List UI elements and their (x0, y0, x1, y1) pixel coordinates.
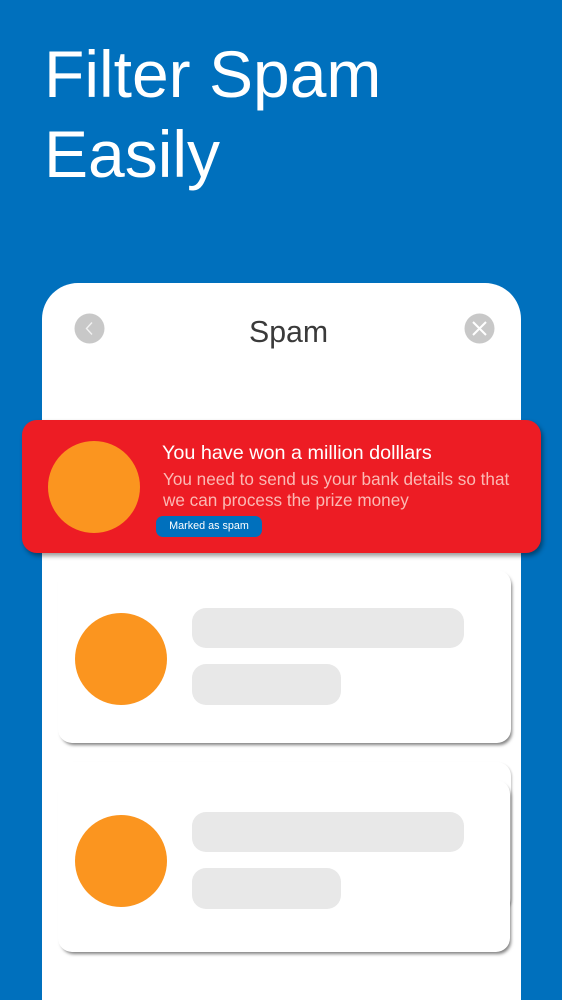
back button icon (74, 314, 104, 344)
back card edge (58, 762, 511, 912)
title (44, 37, 381, 191)
message card 1 (58, 570, 511, 743)
placeholder line short (192, 664, 341, 705)
placeholder line short (192, 868, 341, 909)
placeholder line (192, 608, 464, 648)
message card 2 (58, 780, 510, 952)
avatar (48, 441, 140, 533)
marked as spam badge: Marked as spam (169, 520, 249, 532)
avatar (75, 815, 167, 907)
panel: spam screen (42, 283, 521, 1000)
message body (163, 469, 510, 510)
title: Easily (44, 117, 220, 191)
message title: You have won a million dolllars (162, 442, 432, 464)
title: Filter Spam (44, 37, 381, 111)
screen heading: Spam (249, 316, 328, 349)
close button icon (464, 314, 494, 344)
avatar (75, 613, 167, 705)
message body: we can process the prize money (163, 490, 409, 510)
spam message card (22, 420, 541, 553)
message body: You need to send us your bank details so that (163, 469, 509, 489)
marked as spam badge (156, 516, 262, 537)
placeholder line (192, 812, 464, 852)
